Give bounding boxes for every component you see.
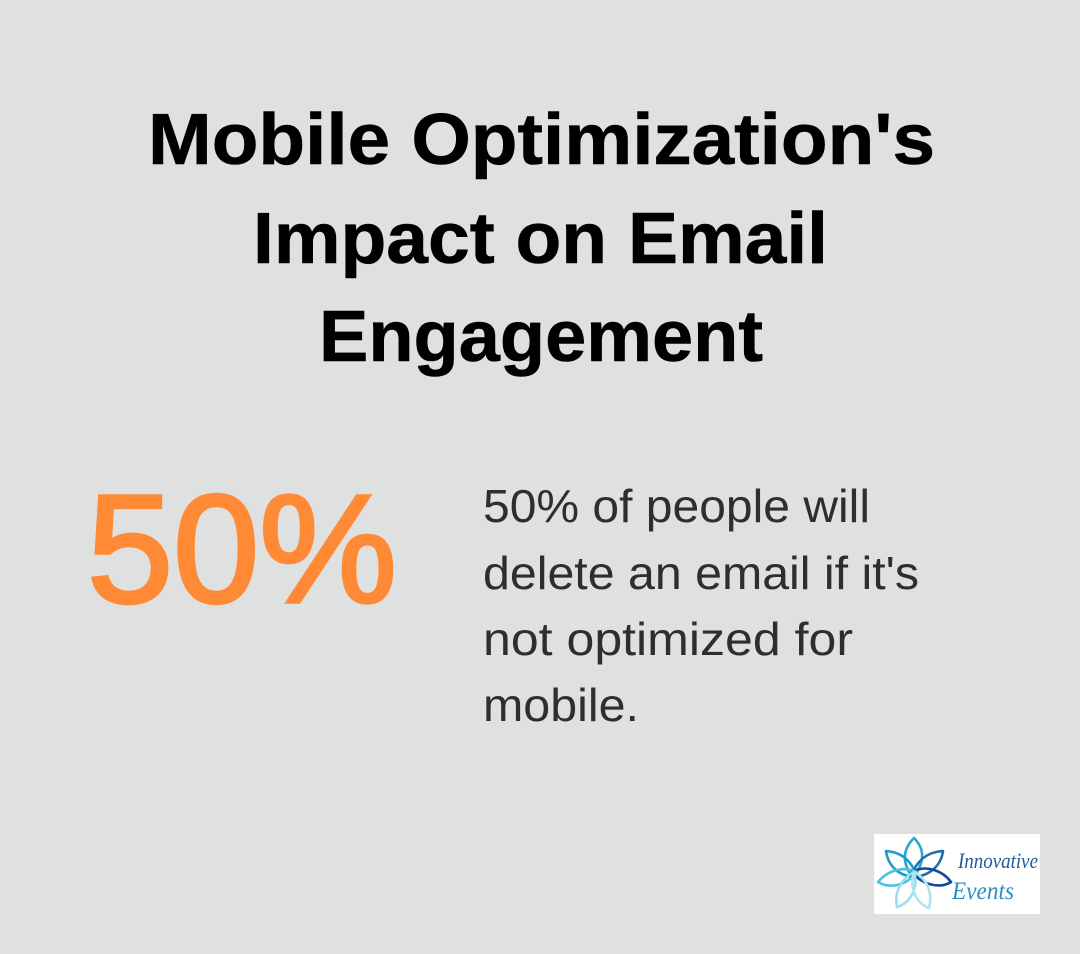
title: Impact on Email [253, 199, 828, 279]
title [148, 100, 935, 377]
logo wordmark [951, 848, 1038, 905]
title: Engagement [319, 297, 763, 377]
description text [483, 480, 919, 731]
icon: lotus flower [878, 838, 951, 908]
description text: not optimized for [483, 613, 853, 665]
description text: 50% of people will [483, 480, 870, 532]
big statistic: 50% [87, 463, 397, 635]
logo wordmark: Events [951, 878, 1014, 905]
logo wordmark: Innovative [957, 848, 1038, 873]
description text: mobile. [483, 679, 639, 731]
logo: Innovative Events [874, 834, 1040, 914]
description text: delete an email if it's [483, 547, 919, 599]
title: Mobile Optimization's [148, 100, 935, 180]
